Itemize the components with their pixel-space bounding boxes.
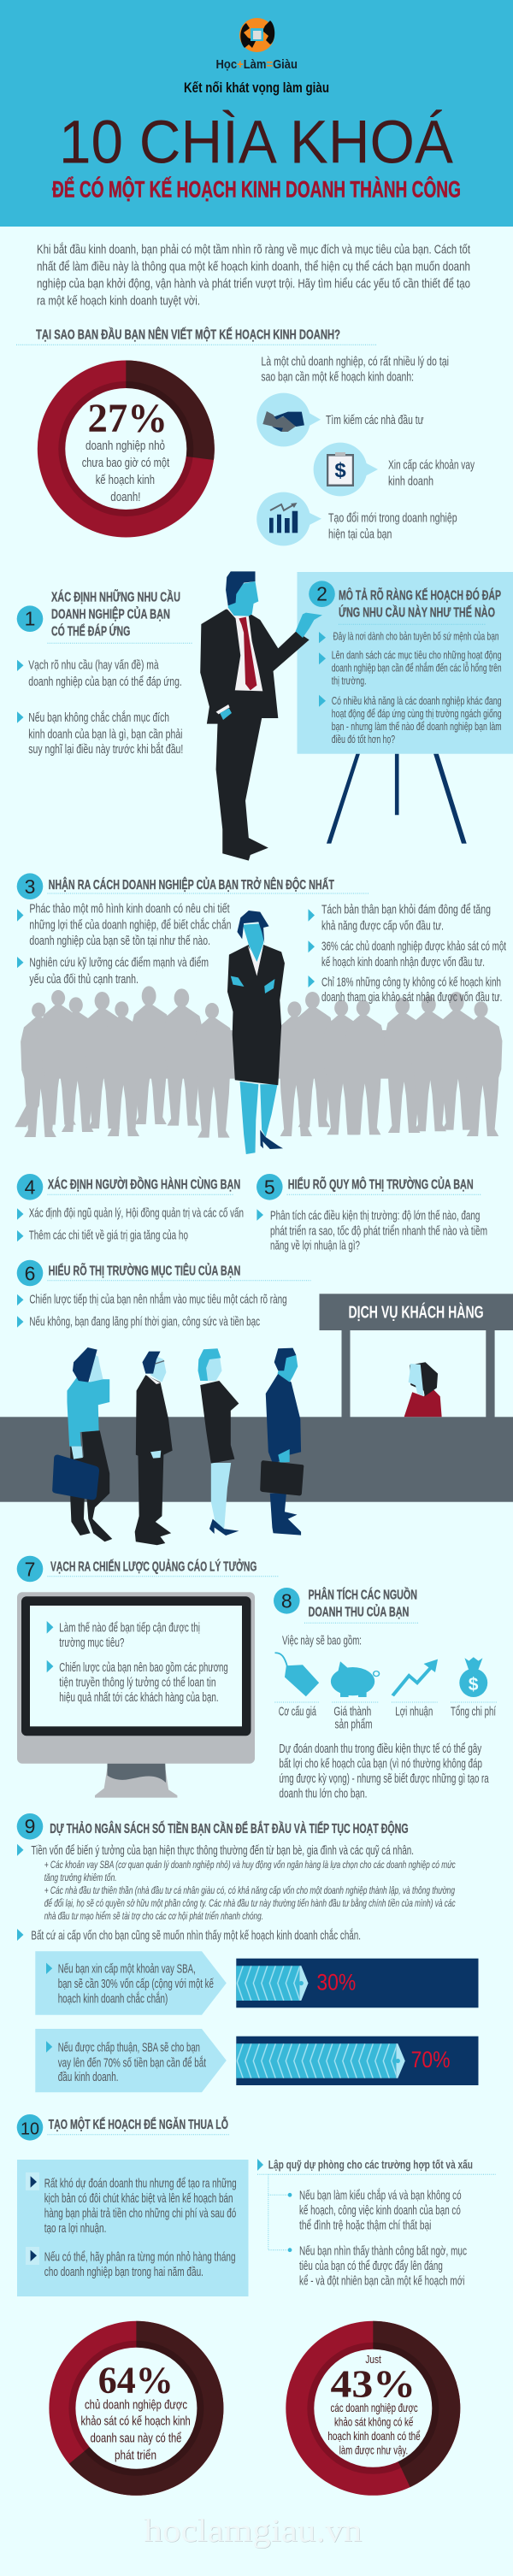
- figure: businessman: [200, 571, 322, 861]
- header banner: [0, 0, 513, 227]
- section 1: suy nghĩ lại điều này trước khi bắt đầu!: [28, 742, 183, 757]
- section 6: Chiến lược tiếp thị của bạn nên nhắm vào mục tiêu một cách rõ ràng: [29, 1292, 287, 1306]
- panel: forecast advice: tạo ra lợi nhuận.: [44, 2221, 106, 2236]
- callout: 30% SBA: bạn sẽ cần 30% vốn cấp (cộng với một kế: [58, 1977, 214, 1991]
- section 9: 9: [25, 1815, 35, 1837]
- reason: innovation: hiện tại của bạn: [328, 527, 392, 541]
- section 7 heading: 7: [25, 1558, 35, 1580]
- computer monitor panel: trường mục tiêu?: [59, 1636, 124, 1650]
- contingency list: [257, 2158, 496, 2288]
- donut chart: 43%: khảo sát không có kế: [334, 2414, 413, 2428]
- panel: forecast advice: Rất khó dự đoán doanh thu nhưng để tạo ra những: [44, 2176, 237, 2190]
- section 8: $: [469, 1675, 479, 1695]
- section 8: Lợi nhuận: [395, 1705, 433, 1719]
- section 6: HIỂU RÕ THỊ TRƯỜNG MỤC TIÊU CỦA BẠN: [49, 1262, 240, 1279]
- section 8: doanh thu lớn cho bạn.: [279, 1787, 367, 1801]
- reason: loans: kinh doanh: [388, 474, 433, 488]
- donut chart: 64%: doanh sau này có thể: [91, 2432, 181, 2446]
- callout: 30% SBA: Nếu bạn xin cấp một khoản vay SBA,: [58, 1961, 196, 1976]
- person: man with briefcase: [260, 1348, 304, 1536]
- figure: crowd silhouettes: [15, 986, 502, 1138]
- person: man with glasses: [135, 1352, 173, 1545]
- callout: 30% SBA: hoạch kinh doanh chắc chắn): [58, 1991, 168, 2006]
- section 8: [274, 1587, 497, 1801]
- figure: queue of customers: [52, 1347, 304, 1545]
- section 1: doanh nghiệp của bạn có thể đáp ứng.: [28, 675, 182, 689]
- reason: loans: Xin cấp các khoản vay: [388, 457, 475, 472]
- section 10 heading: TẠO MỘT KẾ HOẠCH ĐỂ NGĂN THUA LỖ: [49, 2116, 228, 2132]
- section 4: XÁC ĐỊNH NGƯỜI ĐỒNG HÀNH CÙNG BẠN: [48, 1176, 240, 1193]
- section 3: 3: [25, 875, 35, 898]
- section 7 heading: [17, 1556, 279, 1582]
- reason: investors: Tìm kiếm các nhà đầu tư: [326, 413, 424, 427]
- section 3: [17, 873, 369, 899]
- icon: bar chart with arrow: [269, 503, 298, 533]
- callout: 70% SBA: vay lên đến 70% số tiền bạn cần để bắt: [58, 2055, 207, 2070]
- section 1: kinh doanh của bạn là gì, bạn cần phải: [28, 727, 182, 741]
- logo wordmark: Học+Làm=Giàu: [215, 58, 298, 72]
- section 4: Xác định đội ngũ quản lý, Hội đồng quản trị và các cố vấn: [29, 1205, 244, 1220]
- section 3 left text: yếu của đối thủ cạnh tranh.: [29, 972, 139, 987]
- section 6: Nếu không, bạn đang lãng phí thời gian, công sức và tiền bạc: [29, 1315, 260, 1329]
- computer monitor panel: tiện truyền thông lý tưởng có thể loan tin: [59, 1676, 216, 1690]
- section 8: Cơ cấu giá: [279, 1705, 316, 1719]
- reason: innovation: Tạo đổi mới trong doanh nghiệp: [328, 511, 457, 526]
- section 7 heading: VẠCH RA CHIẾN LƯỢC QUẢNG CÁO LÝ TƯỞNG: [50, 1559, 256, 1575]
- section 9: [17, 1813, 456, 1942]
- donut chart: 43%: 43%: [330, 2361, 416, 2405]
- bar chart: 70%: [236, 2037, 479, 2085]
- section 5: năng về lợi nhuận là gì?: [270, 1239, 360, 1253]
- bar chart: 30%: [236, 1959, 479, 2007]
- section 2 board: [298, 572, 513, 844]
- icon: clipboard dollar: $: [334, 459, 346, 482]
- computer monitor panel: Làm thế nào để bạn tiếp cận được thị: [59, 1620, 200, 1635]
- donut chart: 43%: Just: [365, 2353, 381, 2366]
- donut chart: 27%: 27%: [87, 396, 168, 441]
- intro paragraph: ra một kế hoạch kinh doanh tuyệt vời.: [37, 294, 200, 309]
- section 8: Giá thành: [333, 1705, 371, 1719]
- figure: standout businesswoman: [227, 911, 285, 1154]
- section 3 left text: những lợi thế của doanh nghiệp, để biết chắc chắn: [29, 918, 232, 933]
- section 8: sản phẩm: [335, 1718, 373, 1732]
- section 3 left text: Phác thảo một mô hình kinh doanh có nêu chi tiết: [29, 902, 230, 917]
- section 3 right text: khả năng được cấp vốn đầu tư.: [321, 919, 444, 934]
- section 9: tăng trưởng khiêm tốn.: [44, 1872, 117, 1883]
- section 1: XÁC ĐỊNH NHỮNG NHU CẦU: [51, 587, 180, 604]
- section 9: nhà đầu tư mạo hiểm sẽ tài trợ cho các cơ hội phát triển nhanh chóng.: [44, 1910, 263, 1922]
- section 5: [256, 1174, 487, 1253]
- section 2 board: 2: [316, 583, 327, 605]
- donut chart: 27%: kế hoạch kinh: [96, 473, 155, 487]
- section 6: 6: [25, 1262, 35, 1284]
- reason: investors: [256, 393, 424, 446]
- figure: service agent: [404, 1362, 442, 1417]
- section 6: [17, 1260, 310, 1329]
- section 8: PHÂN TÍCH CÁC NGUỒN: [308, 1587, 417, 1603]
- section 3 right text: [308, 903, 507, 1005]
- callout: 70% SBA: đầu kinh doanh.: [58, 2070, 118, 2084]
- donut chart: 64%: chủ doanh nghiệp được: [85, 2397, 187, 2412]
- section 4: [17, 1174, 244, 1242]
- panel: forecast advice: [17, 2160, 248, 2296]
- section 10 heading: 10: [21, 2120, 39, 2139]
- donut chart: 43%: [286, 2321, 460, 2496]
- contingency list: thể đình trệ hoặc thậm chí thất bại: [299, 2218, 431, 2232]
- icon: handshake: [262, 411, 304, 432]
- computer monitor panel: hiệu quả nhất tới các khách hàng của bạn.: [59, 1690, 219, 1705]
- bar chart: 70%: 70%: [411, 2047, 451, 2072]
- donut chart: 43%: làm được như vậy.: [339, 2443, 408, 2457]
- section 4: 4: [25, 1176, 36, 1199]
- section 3: NHẬN RA CÁCH DOANH NGHIỆP CỦA BẠN TRỞ NÊN ĐỘC NHẤT: [49, 876, 334, 893]
- section 3 left text: doanh nghiệp của bạn sẽ tồn tại như thế nào.: [29, 934, 210, 948]
- donut chart: 27%: doanh!: [110, 490, 140, 504]
- panel: forecast advice: Nếu có thể, hãy phân ra từng món nhỏ hàng tháng: [44, 2249, 236, 2264]
- callout: 70% SBA: Nếu được chấp thuận, SBA sẽ cho bạn: [58, 2040, 200, 2054]
- section 1: Nếu bạn không chắc chắn mục đích: [28, 710, 169, 725]
- section 1: [17, 587, 193, 757]
- donut chart: 27%: chưa bao giờ có một: [82, 456, 170, 470]
- bar chart: 30%: 30%: [316, 1970, 356, 1995]
- section 8: DOANH THU CỦA BẠN: [308, 1604, 409, 1620]
- customer service counter: [0, 1294, 513, 1502]
- donut chart: 64%: khảo sát có kế hoạch kinh: [80, 2414, 191, 2429]
- reason: innovation: [256, 492, 457, 545]
- reasons intro text: sao bạn cần một kế hoạch kinh doanh:: [261, 369, 414, 384]
- section 8: Việc này sẽ bao gồm:: [282, 1633, 362, 1648]
- donut chart: 27%: [38, 361, 215, 537]
- section 1: DOANH NGHIỆP CỦA BẠN: [51, 605, 170, 622]
- donut chart: 64%: phát triển: [115, 2449, 156, 2463]
- board legs: [327, 754, 467, 844]
- icons: revenue sources: [274, 1653, 487, 1697]
- section 4: Thêm các chi tiết về giá trị gia tăng của họ: [29, 1228, 188, 1242]
- donut chart: 43%: các doanh nghiệp được: [330, 2401, 418, 2414]
- panel: forecast advice: cho doanh nghiệp bạn trong hai năm đầu.: [44, 2265, 203, 2279]
- footer website: hoclamgiau.vn: [144, 2514, 363, 2549]
- title: 10 CHÌA KHOÁ: [59, 109, 454, 177]
- donut chart: 64%: [49, 2321, 223, 2496]
- person: woman with bag: [52, 1347, 112, 1541]
- section 1: CÓ THỂ ĐÁP ỨNG: [51, 622, 130, 639]
- section 2 board: điều đó tốt hơn họ?: [332, 733, 395, 746]
- icon: clipboard dollar: [327, 452, 354, 486]
- callout: 70% SBA: [35, 2029, 227, 2092]
- section 3 left text: Nghiên cứu kỹ lưỡng các điểm mạnh và điểm: [29, 956, 209, 970]
- donut chart: 64%: 64%: [98, 2359, 174, 2401]
- callout: 30% SBA: [35, 1951, 227, 2015]
- person: woman in skirt: [198, 1348, 239, 1536]
- donut chart: 27%: doanh nghiệp nhỏ: [86, 439, 165, 453]
- section 10 heading: [17, 2114, 229, 2141]
- computer monitor panel: [17, 1592, 255, 1798]
- contingency list: tiêu của bạn có thể được đẩy lên đáng: [299, 2259, 443, 2273]
- section 1: Vạch rõ nhu cầu (hay vấn đề) mà: [28, 658, 159, 673]
- section 8: 8: [281, 1590, 292, 1612]
- monitor stand: [95, 1764, 177, 1798]
- intro paragraph: [37, 243, 471, 309]
- heading: why write a plan: TẠI SAO BAN ĐẦU BẠN NÊN VIẾT MỘT KẾ HOẠCH KINH DOANH?: [36, 327, 340, 343]
- panel: forecast advice: kịch bản có đôi chút khác biệt và lên kế hoạch bán: [44, 2191, 233, 2206]
- footer website: hoclamgiau.vn: [144, 2513, 362, 2549]
- reasons intro text: [261, 354, 449, 384]
- tagline: Kết nối khát vọng làm giàu: [184, 80, 329, 96]
- section 3 left text: [17, 902, 231, 987]
- panel: forecast advice: hàng bạn phải trả tiền cho những chi phí và sau đó: [44, 2206, 236, 2220]
- section 2 board: thị trường.: [332, 675, 367, 687]
- logo: [239, 18, 274, 52]
- reason: loans: [314, 443, 475, 496]
- donut chart: 43%: hoạch kinh doanh có thể: [327, 2429, 421, 2443]
- section 5: 5: [264, 1176, 275, 1199]
- computer monitor panel: Chiến lược của bạn nên bao gồm các phương: [59, 1660, 228, 1675]
- section 1: 1: [25, 607, 35, 629]
